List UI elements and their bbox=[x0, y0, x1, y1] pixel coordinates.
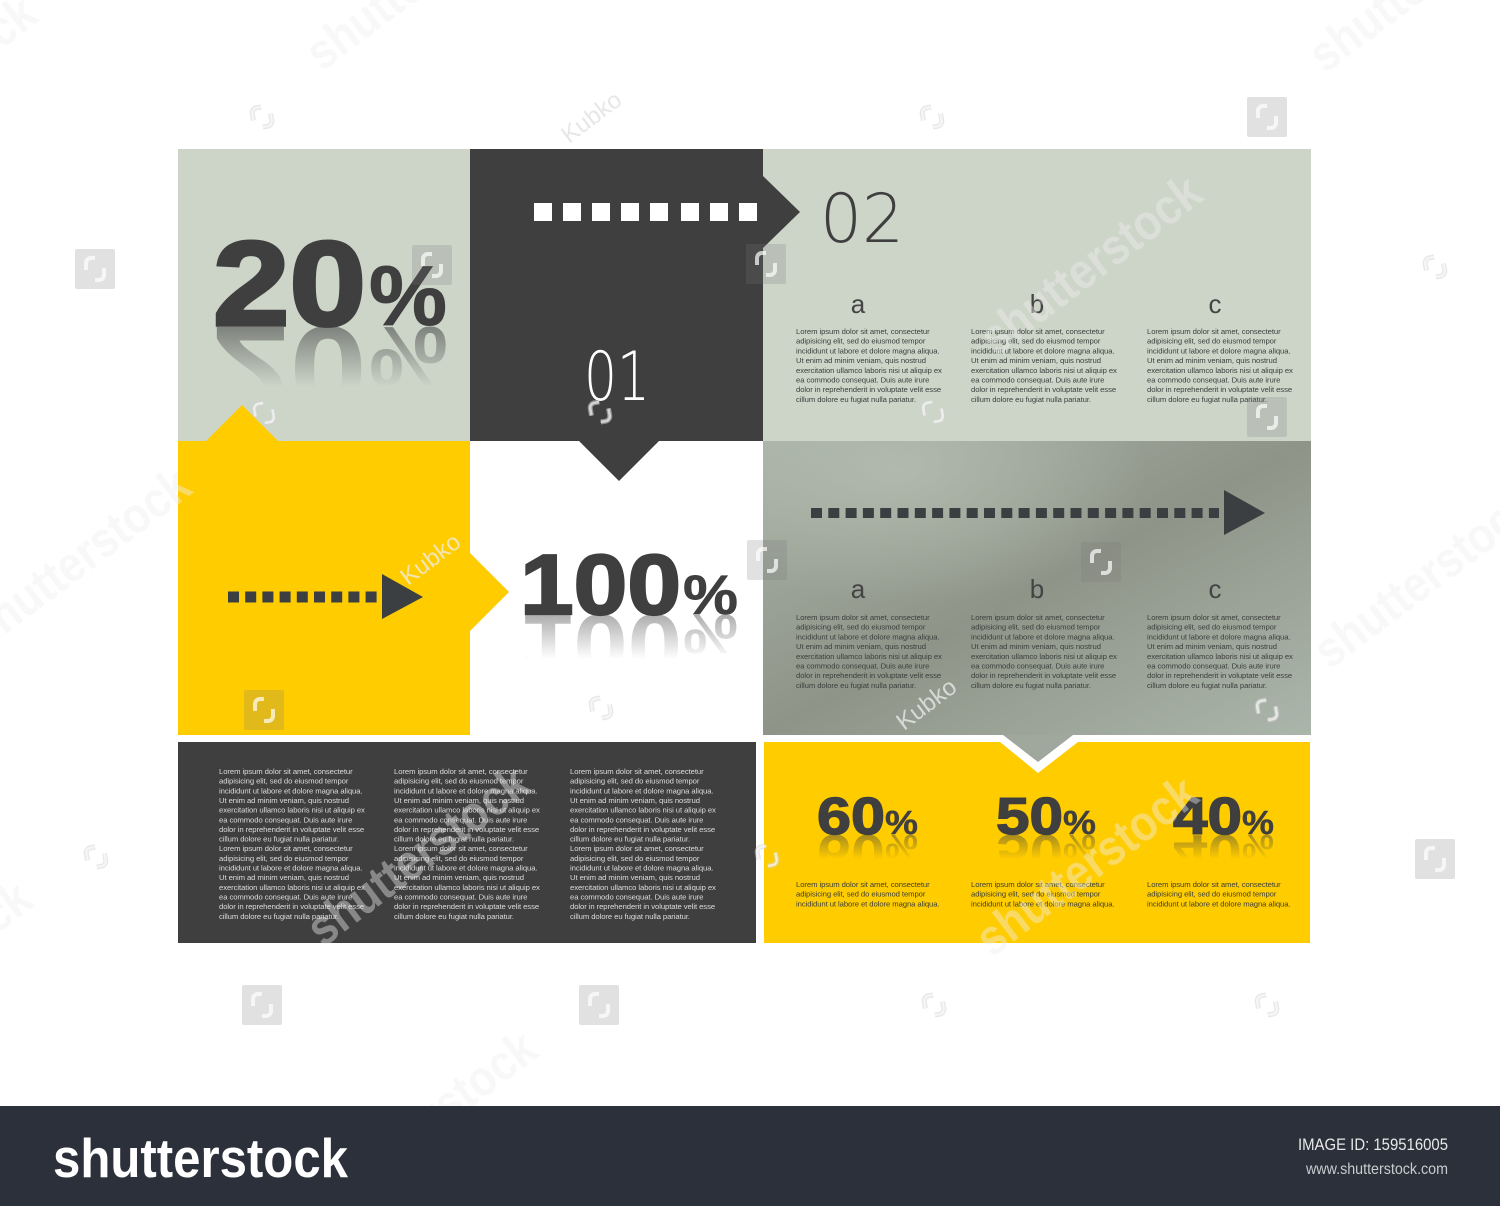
column b text: dolor in reprehenderit in voluptate velit esse bbox=[971, 385, 1116, 394]
column b text: Ut enim ad minim veniam, quis nostrud bbox=[971, 356, 1101, 365]
figure: 20 percent bbox=[213, 217, 447, 351]
stat: 40 percent: % bbox=[1242, 828, 1274, 865]
panel: dark text block bbox=[178, 742, 756, 943]
figure: 100 percent: % bbox=[683, 563, 738, 626]
column a text: ea commodo consequat. Duis aute irure bbox=[796, 662, 929, 670]
column a heading: a bbox=[851, 574, 866, 604]
stat text 3: adipisicing elit, sed do eiusmod tempor bbox=[1147, 890, 1277, 899]
column a text: Lorem ipsum dolor sit amet, consectetur bbox=[796, 613, 930, 622]
column a text: Ut enim ad minim veniam, quis nostrud bbox=[796, 356, 926, 365]
arrow: pointer right bbox=[763, 176, 800, 248]
stat text 2: adipisicing elit, sed do eiusmod tempor bbox=[971, 890, 1101, 899]
column a text: ea commodo consequat. Duis aute irure bbox=[796, 376, 929, 384]
stat text 3: Lorem ipsum dolor sit amet, consectetur bbox=[1147, 880, 1281, 889]
column c text: Ut enim ad minim veniam, quis nostrud bbox=[1147, 356, 1277, 365]
stat: 40 percent: 40 bbox=[1173, 788, 1242, 846]
stat: 50 percent bbox=[996, 788, 1096, 881]
panel: 01 dark section bbox=[470, 149, 800, 481]
text column 2: adipisicing elit, sed do eiusmod tempor bbox=[394, 854, 524, 863]
text column 1: exercitation ullamco laboris nisi ut aliquip ex bbox=[219, 806, 365, 815]
number 01: 01 bbox=[584, 338, 650, 417]
stat text 1: adipisicing elit, sed do eiusmod tempor bbox=[796, 890, 926, 899]
text column 2: Lorem ipsum dolor sit amet, consectetur bbox=[394, 844, 528, 853]
column c text: Ut enim ad minim veniam, quis nostrud bbox=[1147, 642, 1277, 651]
column c text: exercitation ullamco laboris nisi ut aliquip ex bbox=[1147, 366, 1293, 375]
text column 1: adipisicing elit, sed do eiusmod tempor bbox=[219, 777, 349, 786]
column b text: adipisicing elit, sed do eiusmod tempor bbox=[971, 337, 1101, 346]
text column 2: ea commodo consequat. Duis aute irure bbox=[394, 815, 527, 824]
text column 2: cillum dolore eu fugiat nulla pariatur. bbox=[394, 912, 514, 921]
number 02: 02 bbox=[820, 180, 904, 259]
text column 3: exercitation ullamco laboris nisi ut aliquip ex bbox=[570, 883, 716, 892]
text column 1: dolor in reprehenderit in voluptate velit esse bbox=[219, 825, 364, 834]
column a text: exercitation ullamco laboris nisi ut aliquip ex bbox=[796, 366, 942, 375]
stat text 2: incididunt ut labore et dolore magna aliqua. bbox=[971, 899, 1114, 908]
text column 2: exercitation ullamco laboris nisi ut aliquip ex bbox=[394, 806, 540, 815]
column a text: adipisicing elit, sed do eiusmod tempor bbox=[796, 623, 926, 632]
column c text: cillum dolore eu fugiat nulla pariatur. bbox=[1147, 395, 1267, 404]
text column 3: ea commodo consequat. Duis aute irure bbox=[570, 815, 703, 824]
figure: 20 percent: % bbox=[369, 249, 447, 343]
stat: 50 percent: % bbox=[1063, 804, 1096, 841]
stat text 1: incididunt ut labore et dolore magna aliqua. bbox=[796, 899, 940, 908]
column a text: Ut enim ad minim veniam, quis nostrud bbox=[796, 642, 926, 651]
text column 2: cillum dolore eu fugiat nulla pariatur. bbox=[394, 835, 514, 844]
stat text 1: Lorem ipsum dolor sit amet, consectetur bbox=[796, 880, 930, 889]
reflection: 20 percent: 20 bbox=[212, 301, 367, 435]
reflection: 100 percent bbox=[519, 596, 738, 691]
column c text: incididunt ut labore et dolore magna aliqua. bbox=[1147, 346, 1290, 355]
stat: 50 percent: % bbox=[1063, 828, 1096, 865]
text column 3: Ut enim ad minim veniam, quis nostrud bbox=[570, 873, 700, 882]
column c text: Lorem ipsum dolor sit amet, consectetur bbox=[1147, 327, 1281, 336]
column b text: Ut enim ad minim veniam, quis nostrud bbox=[971, 642, 1101, 651]
column b text: incididunt ut labore et dolore magna aliqua. bbox=[971, 346, 1114, 355]
pointer border bbox=[1000, 735, 1078, 773]
pointer: grey tip bbox=[1003, 735, 1073, 762]
column c text: cillum dolore eu fugiat nulla pariatur. bbox=[1147, 681, 1267, 690]
text column 3: Lorem ipsum dolor sit amet, consectetur bbox=[570, 844, 704, 853]
footer bar bbox=[0, 1106, 1500, 1206]
text column 3: cillum dolore eu fugiat nulla pariatur. bbox=[570, 835, 690, 844]
column a text: adipisicing elit, sed do eiusmod tempor bbox=[796, 337, 926, 346]
column a text: dolor in reprehenderit in voluptate velit esse bbox=[796, 385, 941, 394]
text column 2: dolor in reprehenderit in voluptate velit esse bbox=[394, 902, 539, 911]
watermark overlay: Kubko bbox=[891, 673, 962, 736]
column c text: dolor in reprehenderit in voluptate velit esse bbox=[1147, 671, 1292, 680]
column c heading: c bbox=[1208, 289, 1222, 319]
panel: gradient section bbox=[763, 441, 1311, 773]
dashed white line bbox=[534, 203, 757, 221]
text column 3: dolor in reprehenderit in voluptate velit esse bbox=[570, 902, 715, 911]
arrow: pointer down bbox=[579, 441, 659, 481]
text column 1: incididunt ut labore et dolore magna aliqua. bbox=[219, 864, 362, 872]
column a text: Lorem ipsum dolor sit amet, consectetur bbox=[796, 327, 930, 336]
stat: 40 percent bbox=[1173, 788, 1274, 881]
column a text: incididunt ut labore et dolore magna aliqua. bbox=[796, 632, 940, 641]
panel: yellow arrow bbox=[178, 405, 509, 735]
column b text: ea commodo consequat. Duis aute irure bbox=[971, 376, 1104, 384]
column c text: exercitation ullamco laboris nisi ut aliquip ex bbox=[1147, 652, 1293, 661]
column b text: Lorem ipsum dolor sit amet, consectetur bbox=[971, 613, 1105, 622]
text column 3: adipisicing elit, sed do eiusmod tempor bbox=[570, 854, 700, 863]
column c text: ea commodo consequat. Duis aute irure bbox=[1147, 662, 1280, 670]
text column 2: exercitation ullamco laboris nisi ut aliquip ex bbox=[394, 883, 540, 892]
column b text: ea commodo consequat. Duis aute irure bbox=[971, 662, 1104, 670]
text column 3: exercitation ullamco laboris nisi ut aliquip ex bbox=[570, 806, 716, 815]
text column 3: incididunt ut labore et dolore magna aliqua. bbox=[570, 786, 714, 795]
panel: 20 percent bbox=[178, 149, 470, 441]
reflection: 20 percent: % bbox=[369, 309, 448, 403]
footer logo: shutterstock bbox=[53, 1127, 348, 1189]
column c text: adipisicing elit, sed do eiusmod tempor bbox=[1147, 337, 1277, 346]
column c heading: c bbox=[1208, 574, 1222, 604]
column b text: exercitation ullamco laboris nisi ut aliquip ex bbox=[971, 366, 1117, 375]
stat text 3: incididunt ut labore et dolore magna aliqua. bbox=[1147, 899, 1290, 908]
column b text: cillum dolore eu fugiat nulla pariatur. bbox=[971, 395, 1091, 404]
stat: 60 percent: 60 bbox=[817, 788, 885, 846]
text column 1: Lorem ipsum dolor sit amet, consectetur bbox=[219, 767, 353, 776]
text column 3: incididunt ut labore et dolore magna aliqua. bbox=[570, 864, 714, 872]
text column 1: cillum dolore eu fugiat nulla pariatur. bbox=[219, 835, 339, 844]
figure: 100 percent bbox=[519, 538, 738, 691]
column a heading: a bbox=[851, 289, 866, 319]
text column 2: incididunt ut labore et dolore magna aliqua. bbox=[394, 786, 538, 795]
column b text: cillum dolore eu fugiat nulla pariatur. bbox=[971, 681, 1091, 690]
column a text: exercitation ullamco laboris nisi ut aliquip ex bbox=[796, 652, 942, 661]
text column 1: ea commodo consequat. Duis aute irure bbox=[219, 815, 352, 824]
dashed arrow bbox=[228, 574, 423, 619]
text column 2: ea commodo consequat. Duis aute irure bbox=[394, 892, 527, 901]
text column 1: incididunt ut labore et dolore magna aliqua. bbox=[219, 786, 362, 795]
text column 3: Lorem ipsum dolor sit amet, consectetur bbox=[570, 767, 704, 776]
text column 2: adipisicing elit, sed do eiusmod tempor bbox=[394, 777, 524, 786]
stat: 40 percent: 40 bbox=[1173, 823, 1242, 881]
website: www.shutterstock.com bbox=[1305, 1161, 1448, 1178]
panel: 02 section bbox=[763, 149, 1311, 441]
stat text 2: Lorem ipsum dolor sit amet, consectetur bbox=[971, 880, 1105, 889]
reflection: 20 percent bbox=[212, 301, 448, 435]
text column 2: Lorem ipsum dolor sit amet, consectetur bbox=[394, 767, 528, 776]
text column 1: Ut enim ad minim veniam, quis nostrud bbox=[219, 796, 349, 805]
column c text: ea commodo consequat. Duis aute irure bbox=[1147, 376, 1280, 384]
column b text: incididunt ut labore et dolore magna aliqua. bbox=[971, 632, 1114, 641]
column c text: incididunt ut labore et dolore magna aliqua. bbox=[1147, 632, 1290, 641]
text column 3: adipisicing elit, sed do eiusmod tempor bbox=[570, 777, 700, 786]
text column 2: incididunt ut labore et dolore magna aliqua. bbox=[394, 864, 538, 872]
text column 1: Ut enim ad minim veniam, quis nostrud bbox=[219, 873, 349, 882]
column a text: incididunt ut labore et dolore magna aliqua. bbox=[796, 346, 940, 355]
stat: 60 percent: % bbox=[885, 828, 918, 865]
reflection: 100 percent: 100 bbox=[519, 596, 682, 691]
text column 3: dolor in reprehenderit in voluptate velit esse bbox=[570, 825, 715, 834]
column c text: dolor in reprehenderit in voluptate velit esse bbox=[1147, 385, 1292, 394]
text column 1: ea commodo consequat. Duis aute irure bbox=[219, 892, 352, 901]
watermark overlay: shutterstock bbox=[296, 754, 539, 957]
stat: 50 percent: 50 bbox=[996, 788, 1063, 846]
stat: 60 percent bbox=[817, 788, 918, 881]
watermark overlay: Kubko bbox=[556, 86, 627, 149]
text column 3: Ut enim ad minim veniam, quis nostrud bbox=[570, 796, 700, 805]
text column 2: Ut enim ad minim veniam, quis nostrud bbox=[394, 873, 524, 882]
reflection: 100 percent: % bbox=[683, 603, 738, 666]
column b text: exercitation ullamco laboris nisi ut aliquip ex bbox=[971, 652, 1117, 661]
column a text: cillum dolore eu fugiat nulla pariatur. bbox=[796, 681, 916, 690]
text column 3: cillum dolore eu fugiat nulla pariatur. bbox=[570, 912, 690, 921]
text column 1: exercitation ullamco laboris nisi ut aliquip ex bbox=[219, 883, 365, 892]
watermark overlay: Kubko bbox=[395, 528, 466, 591]
text column 2: Ut enim ad minim veniam, quis nostrud bbox=[394, 796, 524, 805]
dashed arrow bbox=[811, 490, 1265, 535]
column b text: dolor in reprehenderit in voluptate velit esse bbox=[971, 671, 1116, 680]
column c text: adipisicing elit, sed do eiusmod tempor bbox=[1147, 623, 1277, 632]
column b text: Lorem ipsum dolor sit amet, consectetur bbox=[971, 327, 1105, 336]
text column 1: Lorem ipsum dolor sit amet, consectetur bbox=[219, 844, 353, 853]
column b heading: b bbox=[1030, 574, 1044, 604]
text column 3: ea commodo consequat. Duis aute irure bbox=[570, 892, 703, 901]
column b text: adipisicing elit, sed do eiusmod tempor bbox=[971, 623, 1101, 632]
column a text: dolor in reprehenderit in voluptate velit esse bbox=[796, 671, 941, 680]
stat: 50 percent: 50 bbox=[996, 823, 1063, 881]
watermark overlay: shutterstock bbox=[969, 163, 1212, 366]
panel: yellow statistics bbox=[764, 735, 1310, 943]
text column 2: dolor in reprehenderit in voluptate velit esse bbox=[394, 825, 539, 834]
figure: 100 percent: 100 bbox=[520, 538, 681, 633]
column c text: Lorem ipsum dolor sit amet, consectetur bbox=[1147, 613, 1281, 622]
column a text: cillum dolore eu fugiat nulla pariatur. bbox=[796, 395, 916, 404]
stat: 40 percent: % bbox=[1242, 804, 1274, 841]
text column 1: cillum dolore eu fugiat nulla pariatur. bbox=[219, 912, 339, 921]
text column 1: adipisicing elit, sed do eiusmod tempor bbox=[219, 854, 349, 863]
watermark overlay: shutterstock bbox=[965, 764, 1208, 967]
column b heading: b bbox=[1030, 289, 1044, 319]
stat: 60 percent: % bbox=[885, 804, 918, 841]
image id: IMAGE ID: 159516005 bbox=[1298, 1135, 1448, 1154]
stat: 60 percent: 60 bbox=[817, 823, 885, 881]
figure: 20 percent: 20 bbox=[213, 217, 366, 351]
text column 1: dolor in reprehenderit in voluptate velit esse bbox=[219, 902, 364, 911]
